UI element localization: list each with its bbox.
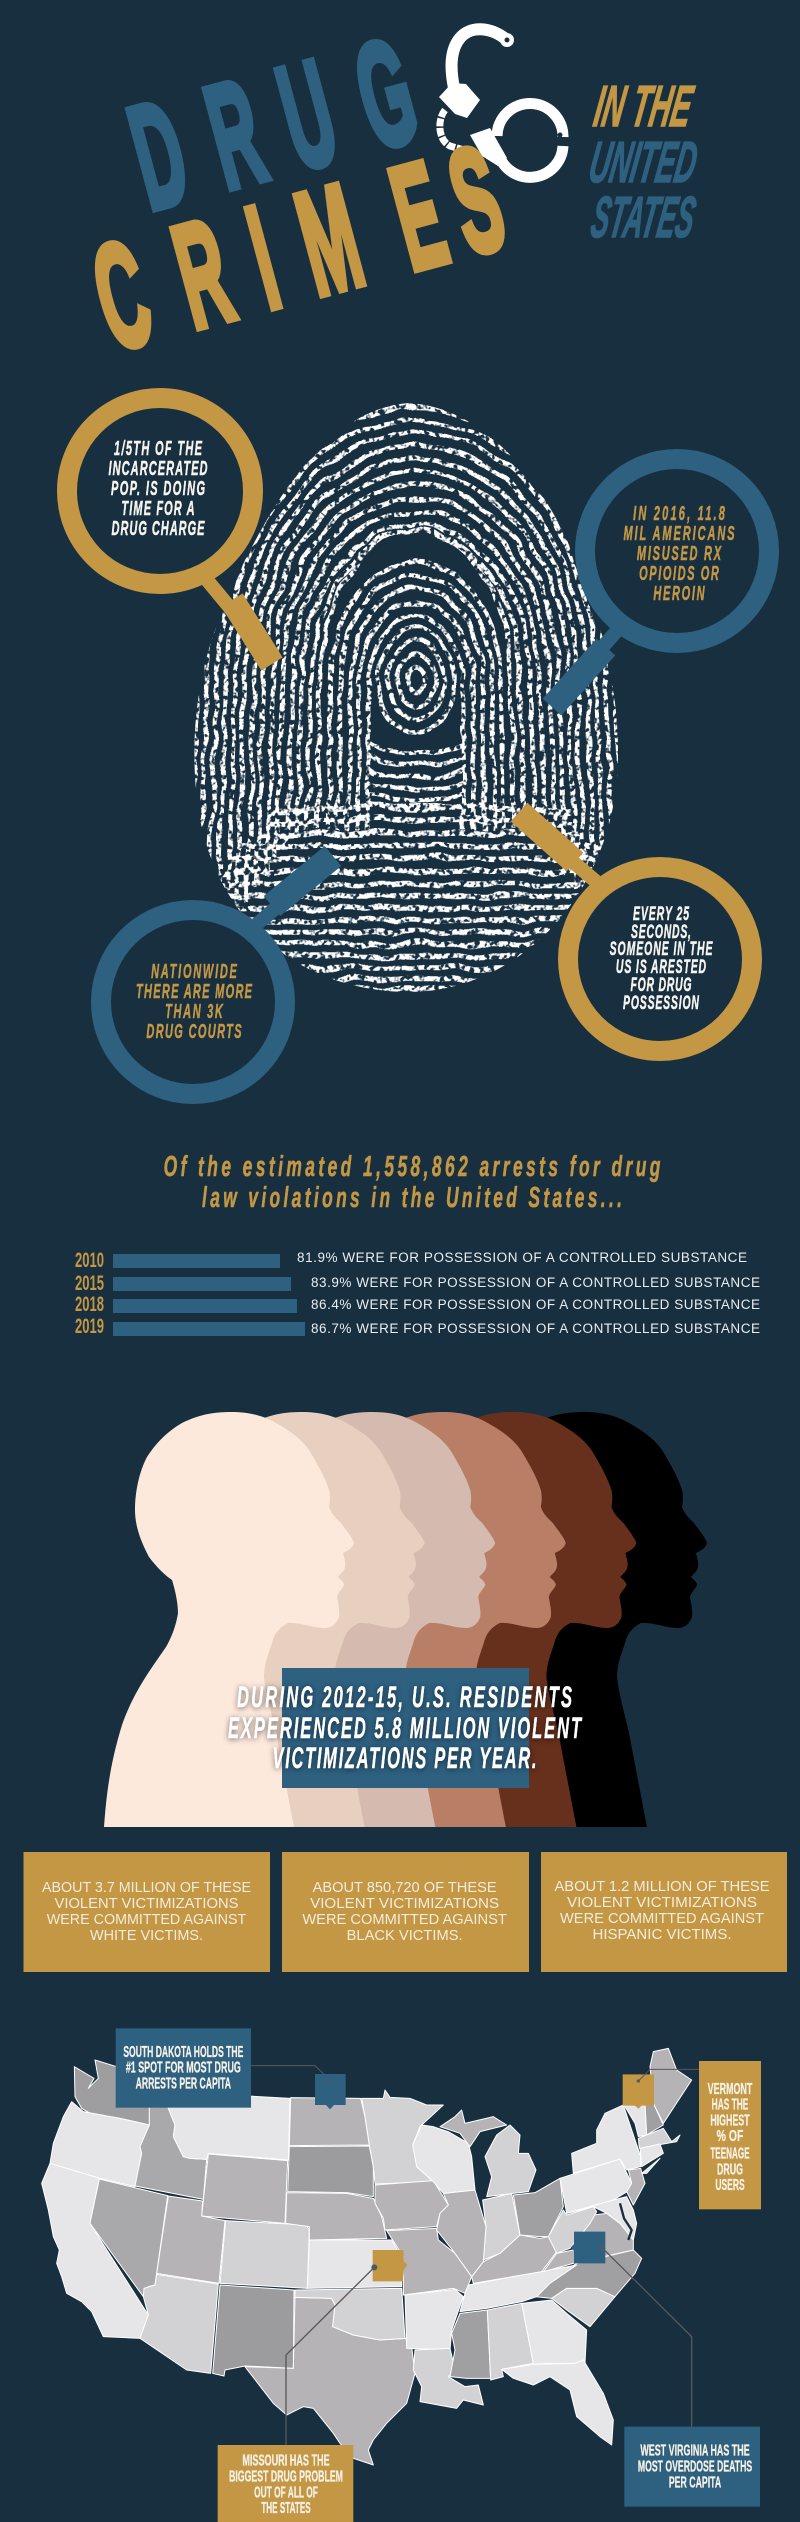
panel: hispanic victims: VIOLENT VICTIMIZATIONS [567, 1894, 757, 1911]
magnifier handle [250, 900, 285, 930]
callout text: MIL AMERICANS [623, 523, 735, 545]
marker square [373, 2250, 407, 2281]
panel: white victims [24, 1852, 270, 1972]
callout text: IN 2016, 11.8 [633, 503, 725, 525]
magnifier handle [565, 855, 600, 885]
callout text: THERE ARE MORE [136, 981, 253, 1003]
callout text: HEROIN [653, 583, 705, 605]
map marker: South Dakota with callout [116, 2028, 346, 2109]
subtitle: in the United States [585, 74, 702, 250]
title word: CRIMES: CRIMES [78, 117, 519, 382]
connector line [286, 2267, 374, 2445]
bar chart: possession arrests by year [75, 1249, 760, 1338]
bar row: 2018: 86.4% WERE FOR POSSESSION OF A CONTROLLED SUBSTANCE [311, 1297, 760, 1312]
callout text: 1/5TH OF THE [114, 438, 203, 460]
map marker: West Virginia with callout [571, 2232, 760, 2507]
magnifier lens [585, 459, 769, 643]
bar row: 2019 [75, 1315, 760, 1338]
callout box [218, 2445, 353, 2522]
magnifier: every 25 seconds [519, 812, 752, 1051]
magnifier: misused opioids [552, 459, 769, 707]
marker square [623, 2074, 654, 2109]
callout text: EVERY 25 [633, 904, 689, 925]
bar row: 2015: 2015 [75, 1272, 104, 1295]
panel: white victims: WHITE VICTIMS. [90, 1927, 203, 1944]
title: DRUG CRIMES [78, 9, 563, 382]
magnifier handle [207, 580, 236, 615]
panel: black victims [282, 1852, 529, 1972]
callout text: US IS ARESTED [616, 957, 706, 978]
callout box [699, 2061, 761, 2209]
map marker: South Dakota with callout: #1 SPOT FOR MOST DRUG [126, 2060, 241, 2077]
callout text: THAN 3K [165, 1001, 224, 1023]
panel: hispanic victims: WERE COMMITTED AGAINST [560, 1910, 764, 1927]
callout text: MISUSED RX [637, 543, 722, 565]
map marker: Vermont with callout: DRUG [717, 2161, 743, 2178]
callout text [136, 961, 253, 1043]
connector line [638, 2069, 699, 2081]
callout box [624, 2427, 760, 2507]
heading: estimated arrests [164, 1151, 661, 1214]
map: United States [42, 2048, 692, 2465]
callout text: NATIONWIDE [151, 961, 238, 983]
marker square [571, 2232, 605, 2263]
panel: black victims: ABOUT 850,720 OF THESE [313, 1879, 497, 1896]
icon: handcuffs [439, 29, 563, 177]
callout text: MISSOURI HAS THE [242, 2453, 330, 2470]
bar row: 2010 [75, 1249, 747, 1272]
panel: hispanic victims [541, 1852, 787, 1972]
connector line [602, 2248, 692, 2427]
magnifier lens [101, 910, 285, 1094]
magnifier lens [568, 867, 752, 1051]
map marker: West Virginia with callout: PER CAPITA [669, 2474, 721, 2491]
map marker: Vermont with callout: HIGHEST [710, 2112, 750, 2129]
bar row: 2015: 83.9% WERE FOR POSSESSION OF A CONTROLLED SUBSTANCE [311, 1275, 760, 1290]
callout text: SOMEONE IN THE [610, 939, 713, 960]
callout text: TIME FOR A [121, 498, 195, 520]
magnifier handle [600, 625, 622, 650]
callout text [623, 503, 735, 605]
magnifier: incarcerated population [67, 398, 272, 664]
map marker: Vermont with callout: HAS THE [712, 2097, 748, 2114]
map marker: South Dakota with callout: ARRESTS PER CAPITA [136, 2076, 231, 2093]
bar row: 2010: 81.9% WERE FOR POSSESSION OF A CONTROLLED SUBSTANCE [297, 1250, 747, 1265]
connector line [251, 2066, 330, 2080]
panel: black victims: VIOLENT VICTIMIZATIONS [310, 1895, 499, 1912]
panel: black victims: BLACK VICTIMS. [347, 1927, 463, 1944]
heading: estimated arrests: law violations in the United States... [202, 1182, 622, 1214]
map marker: Vermont with callout [623, 2061, 761, 2209]
bar row: 2019: 2019 [75, 1315, 104, 1338]
panel: white victims: ABOUT 3.7 MILLION OF THESE [42, 1879, 251, 1896]
bar row: 2018: 2018 [75, 1293, 104, 1316]
panel: hispanic victims: ABOUT 1.2 MILLION OF THESE [554, 1878, 770, 1895]
map marker: Missouri with callout: THE STATES [261, 2500, 311, 2517]
callout: violent victimizations: VICTIMIZATIONS PER YEAR. [273, 1742, 536, 1775]
panel: black victims: WERE COMMITTED AGAINST [302, 1911, 507, 1928]
callout box [116, 2028, 251, 2108]
marker square [315, 2074, 346, 2109]
callout: violent victimizations: EXPERIENCED 5.8 MILLION VIOLENT [228, 1712, 583, 1745]
bar row: 2010: 2010 [75, 1249, 104, 1272]
callout: violent victimizations [228, 1668, 583, 1788]
map marker: Vermont with callout: % OF [717, 2128, 743, 2145]
callout text: POSSESSION [623, 993, 700, 1014]
callout text: FOR DRUG [630, 975, 692, 996]
illustration: six head silhouettes [104, 1412, 707, 1827]
fingerprint [187, 403, 645, 990]
callout text: OPIOIDS OR [639, 563, 719, 585]
callout text: SECONDS, [631, 922, 691, 943]
panel: white victims: VIOLENT VICTIMIZATIONS [54, 1895, 238, 1912]
title word: DRUG: DRUG [115, 9, 432, 241]
bar row: 2015 [75, 1272, 760, 1295]
map marker: Vermont with callout: USERS [715, 2177, 745, 2194]
callout text: VERMONT [708, 2081, 753, 2098]
magnifier: drug courts [101, 856, 333, 1094]
callout text [108, 438, 208, 540]
map marker: Missouri with callout: OUT OF ALL OF [254, 2484, 318, 2501]
map marker: Missouri with callout [218, 2250, 407, 2522]
callout text: SOUTH DAKOTA HOLDS THE [123, 2044, 243, 2061]
callout text: DRUG CHARGE [112, 518, 205, 540]
map marker: Missouri with callout: BIGGEST DRUG PROBLEM [229, 2469, 343, 2486]
heading: estimated arrests: Of the estimated 1,558,862 arrests for drug [164, 1151, 661, 1183]
callout text: POP. IS DOING [111, 478, 205, 500]
magnifier lens [67, 398, 253, 584]
panel: white victims: WERE COMMITTED AGAINST [47, 1911, 246, 1928]
callout text: INCARCERATED [108, 458, 208, 480]
map marker: Vermont with callout: TEENAGE [710, 2145, 750, 2162]
callout: violent victimizations: DURING 2012-15, U.S. RESIDENTS [237, 1681, 572, 1714]
panel: hispanic victims: HISPANIC VICTIMS. [592, 1926, 732, 1943]
bar row: 2018 [75, 1293, 760, 1316]
bar row: 2019: 86.7% WERE FOR POSSESSION OF A CONTROLLED SUBSTANCE [311, 1321, 760, 1336]
callout text: DRUG COURTS [146, 1021, 242, 1043]
callout text [610, 904, 713, 1014]
subtitle line: in the: IN THE [590, 74, 698, 139]
